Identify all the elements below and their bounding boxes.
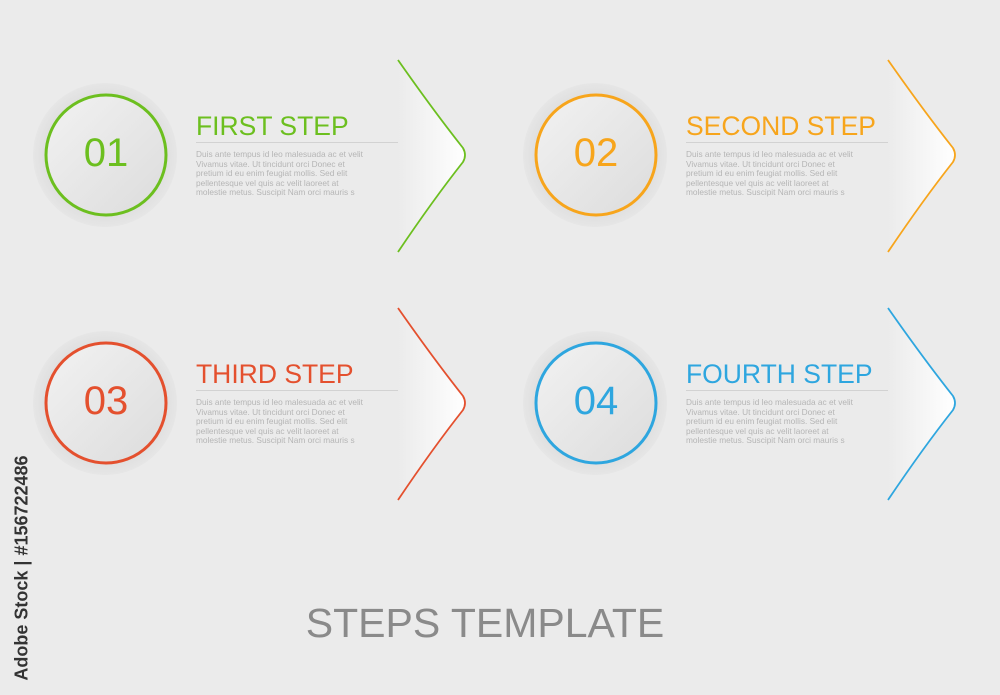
step 1 panel: 01 xyxy=(84,131,128,175)
heading: fourth step: FOURTH STEP xyxy=(686,359,872,389)
icon: badge 02 xyxy=(529,60,956,252)
text block: Duis ante tempus id leo malesuada ac et velit Vivamus vitae. Ut tincidunt orci Donec et pretium id eu enim feugiat mollis. Sed elit pellentesque vel quis ac velit laoreet at molestie metus. Suscipit Nam orci mauris s xyxy=(196,397,363,445)
heading: second step: SECOND STEP xyxy=(686,111,876,141)
text block: Duis ante tempus id leo malesuada ac et velit Vivamus vitae. Ut tincidunt orci Donec et pretium id eu enim feugiat mollis. Sed elit pellentesque vel quis ac velit laoreet at molestie metus. Suscipit Nam orci mauris s xyxy=(686,397,853,445)
text block: Duis ante tempus id leo malesuada ac et velit Vivamus vitae. Ut tincidunt orci Donec et pretium id eu enim feugiat mollis. Sed elit pellentesque vel quis ac velit laoreet at molestie metus. Suscipit Nam orci mauris s xyxy=(686,149,853,197)
step 3 panel: 03 xyxy=(84,379,128,423)
icon: badge 03 xyxy=(39,308,466,500)
icon: badge 04 xyxy=(529,308,956,500)
step 2 panel: 02 xyxy=(574,131,618,175)
heading: first step: FIRST STEP xyxy=(196,111,349,141)
footer title: STEPS TEMPLATE xyxy=(306,600,664,646)
step 2 panel xyxy=(529,60,956,252)
step 1 panel xyxy=(39,60,466,252)
step 3 panel xyxy=(39,308,466,500)
watermark label: Adobe Stock | #156722486 xyxy=(12,455,32,681)
heading: third step: THIRD STEP xyxy=(196,359,354,389)
step 4 panel: 04 xyxy=(574,379,618,423)
icon: badge 01 xyxy=(39,60,466,252)
text block: Duis ante tempus id leo malesuada ac et velit Vivamus vitae. Ut tincidunt orci Donec et pretium id eu enim feugiat mollis. Sed elit pellentesque vel quis ac velit laoreet at molestie metus. Suscipit Nam orci mauris s xyxy=(196,149,363,197)
step 4 panel xyxy=(529,308,956,500)
